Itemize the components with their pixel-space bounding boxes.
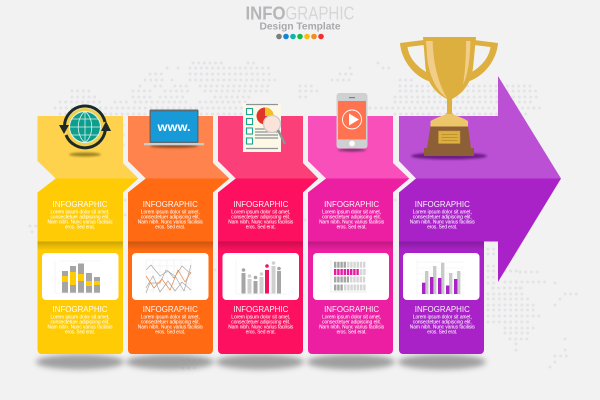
text block top: consectetuer adipiscing elit. xyxy=(322,214,382,220)
text block top: INFOGRAPHIC xyxy=(415,199,470,209)
text block top xyxy=(138,199,203,230)
text block bottom: Lorem ipsum dolor sit amet, xyxy=(413,314,472,320)
icon: smartphone with play button xyxy=(336,93,368,152)
text block top: Lorem ipsum dolor sit amet, xyxy=(50,209,110,215)
panel: red-pink column xyxy=(218,116,318,354)
title: GRAPHIC xyxy=(286,2,354,24)
text block top xyxy=(48,199,113,230)
text block top: Lorem ipsum dolor sit amet, xyxy=(231,209,291,215)
title: INFO xyxy=(246,2,286,24)
white chart card xyxy=(132,253,208,300)
text block top: INFOGRAPHIC xyxy=(143,199,198,209)
text block bottom: Nam nibh. Nunc varius facilisis xyxy=(228,324,294,330)
text block bottom: eros. Sed erat. xyxy=(65,330,95,336)
icon: laptop www xyxy=(144,110,204,148)
white chart card xyxy=(222,253,299,300)
white chart card xyxy=(313,253,389,300)
title colour dots xyxy=(276,34,324,39)
text block top: eros. Sed erat. xyxy=(246,224,276,230)
text block top: Nam nibh. Nunc varius facilisis xyxy=(319,219,384,225)
icon: globe with arrows xyxy=(59,106,111,156)
text block bottom: INFOGRAPHIC xyxy=(324,304,379,314)
text block top: Nam nibh. Nunc varius facilisis xyxy=(228,219,294,225)
panel: magenta column xyxy=(308,116,409,354)
text block top: eros. Sed erat. xyxy=(155,224,186,230)
text block top: Lorem ipsum dolor sit amet, xyxy=(322,209,382,215)
text block bottom: consectetuer adipiscing elit. xyxy=(231,320,291,326)
text block top: consectetuer adipiscing elit. xyxy=(141,214,200,220)
text block top: Nam nibh. Nunc varius facilisis xyxy=(48,219,113,225)
text block top: Nam nibh. Nunc varius facilisis xyxy=(138,219,203,225)
text block bottom: Lorem ipsum dolor sit amet, xyxy=(322,314,382,320)
text block bottom: eros. Sed erat. xyxy=(337,330,367,336)
title xyxy=(246,2,354,39)
text block bottom: Nam nibh. Nunc varius facilisis xyxy=(138,324,203,330)
text block bottom: Lorem ipsum dolor sit amet, xyxy=(231,314,291,320)
text block bottom: INFOGRAPHIC xyxy=(415,304,470,314)
grouped bar chart xyxy=(417,259,465,294)
panel: yellow column xyxy=(38,116,138,354)
text block top: INFOGRAPHIC xyxy=(52,199,108,209)
text block bottom: consectetuer adipiscing elit. xyxy=(50,320,110,326)
title: Design Template xyxy=(260,22,341,32)
panel: orange column xyxy=(128,116,229,354)
text block top: eros. Sed erat. xyxy=(337,224,367,230)
text block top: Lorem ipsum dolor sit amet, xyxy=(141,209,200,215)
icon: laptop www: www. xyxy=(156,120,190,134)
people pictogram chart xyxy=(331,260,367,292)
text block bottom xyxy=(410,304,475,336)
icon: gold trophy xyxy=(400,37,498,160)
text block top: eros. Sed erat. xyxy=(65,224,95,230)
text block bottom: Nam nibh. Nunc varius facilisis xyxy=(48,324,113,330)
text block bottom xyxy=(48,304,113,336)
text block bottom xyxy=(228,304,294,336)
text block bottom: INFOGRAPHIC xyxy=(143,304,198,314)
text block top: Nam nibh. Nunc varius facilisis xyxy=(410,219,475,225)
text block top xyxy=(228,199,294,230)
text block bottom: consectetuer adipiscing elit. xyxy=(322,320,382,326)
text block top: INFOGRAPHIC xyxy=(324,199,379,209)
text block top: consectetuer adipiscing elit. xyxy=(231,214,291,220)
text block bottom: eros. Sed erat. xyxy=(427,330,458,336)
white chart card xyxy=(403,253,480,300)
text block bottom xyxy=(138,304,203,336)
stacked bar chart xyxy=(55,261,101,293)
text block bottom: Lorem ipsum dolor sit amet, xyxy=(141,314,200,320)
text block top: Lorem ipsum dolor sit amet, xyxy=(413,209,472,215)
shadows under columns xyxy=(36,354,486,370)
text block bottom: Nam nibh. Nunc varius facilisis xyxy=(410,324,475,330)
text block bottom: eros. Sed erat. xyxy=(246,330,276,336)
icon: checklist document with magnifier xyxy=(243,103,285,152)
text block top: consectetuer adipiscing elit. xyxy=(413,214,472,220)
text block top xyxy=(410,199,475,230)
text block top: eros. Sed erat. xyxy=(427,224,458,230)
text block bottom: INFOGRAPHIC xyxy=(233,304,288,314)
text block bottom: consectetuer adipiscing elit. xyxy=(413,320,472,326)
text block bottom: Nam nibh. Nunc varius facilisis xyxy=(319,324,384,330)
text block top: INFOGRAPHIC xyxy=(233,199,288,209)
line chart xyxy=(146,260,191,293)
panel: purple arrow column xyxy=(399,76,561,354)
text block bottom: Lorem ipsum dolor sit amet, xyxy=(50,314,110,320)
text block bottom: INFOGRAPHIC xyxy=(52,304,108,314)
lollipop bar chart xyxy=(236,261,287,294)
text block bottom: eros. Sed erat. xyxy=(155,330,186,336)
text block top xyxy=(319,199,384,230)
text block top: consectetuer adipiscing elit. xyxy=(50,214,110,220)
text block bottom: consectetuer adipiscing elit. xyxy=(141,320,200,326)
world map dot background xyxy=(30,63,578,368)
text block bottom xyxy=(319,304,384,336)
white chart card xyxy=(42,253,118,300)
